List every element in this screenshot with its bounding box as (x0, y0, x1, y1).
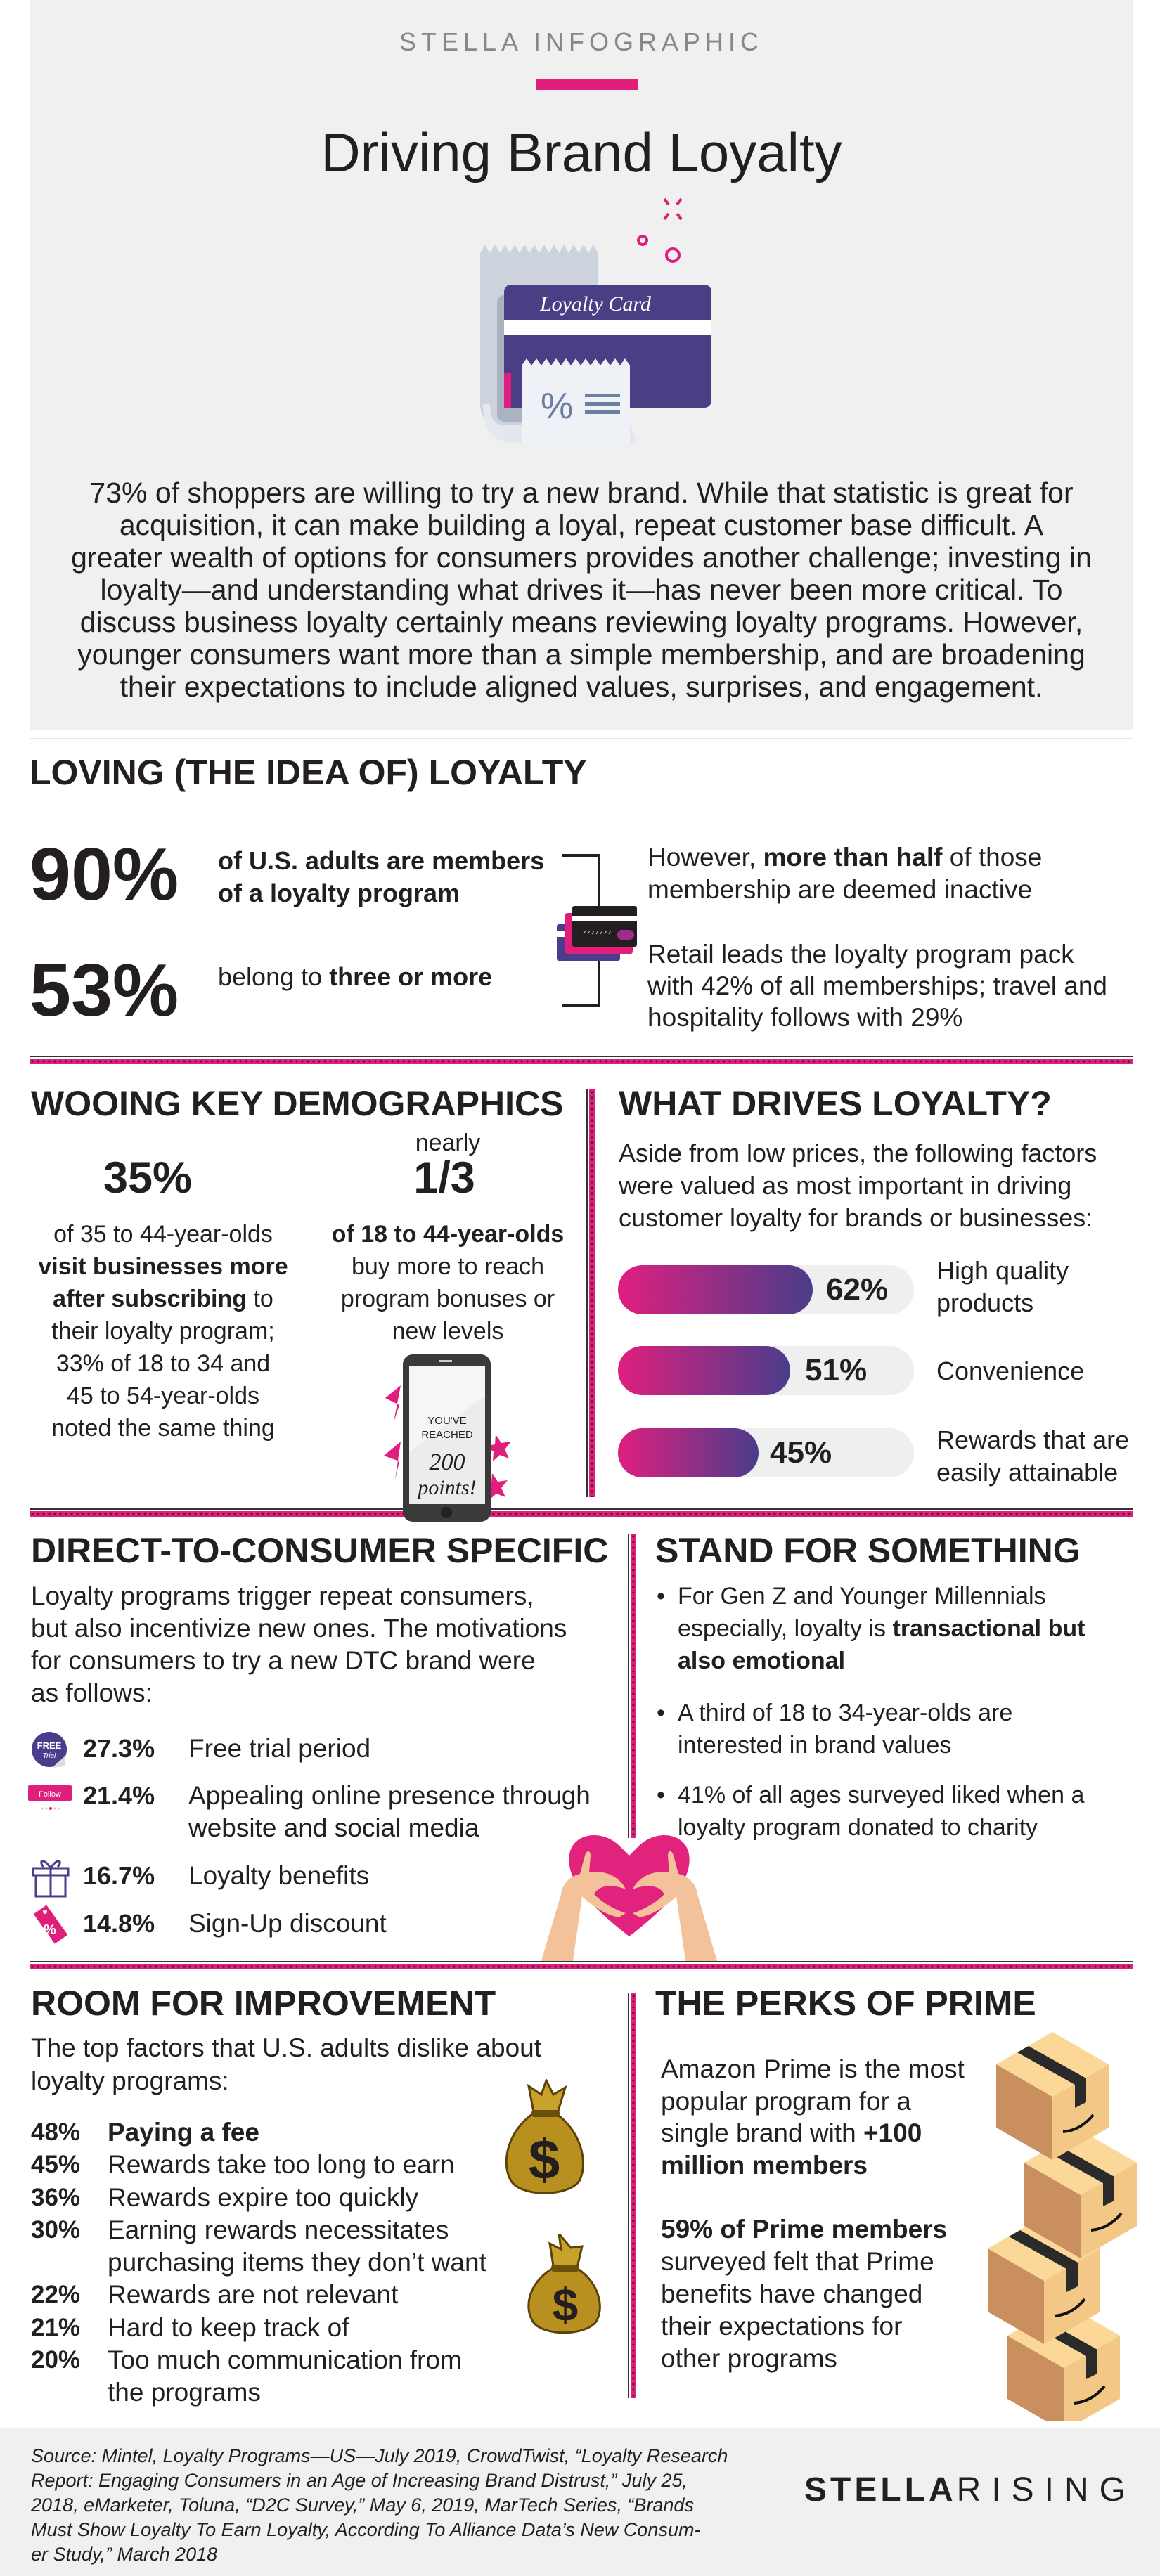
panel: wooing key demographics (31, 1084, 564, 1442)
stat 35% text: noted the same thing (51, 1415, 275, 1442)
dislike list: 20% (31, 2346, 80, 2374)
logo: stella rising: STELLARISING (804, 2471, 1136, 2509)
panel: room for improvement (31, 1983, 541, 2407)
header panel (30, 0, 1133, 730)
panel: stand for something: loyalty program donated to charity (678, 1814, 1038, 1841)
icon: phone 200 points: REACHED (421, 1429, 473, 1441)
heading: THE PERKS OF PRIME (655, 1983, 1036, 2023)
bar 45% (618, 1428, 914, 1477)
intro paragraph: discuss business loyalty certainly means reviewing loyalty programs. However, (80, 606, 1083, 638)
icon: loyalty card with receipt: Loyalty Card (539, 292, 652, 316)
icon: money bag 2: $ (553, 2279, 578, 2331)
dislike list: 22% (31, 2281, 80, 2308)
icon: phone 200 points (384, 1354, 511, 1522)
note: inactive memberships: However, more than half of those (647, 843, 1042, 872)
vertical divider (628, 1993, 636, 2398)
heading: DIRECT-TO-CONSUMER SPECIFIC (31, 1531, 608, 1570)
prime text 1: popular program for a (661, 2086, 911, 2116)
prime text 2 (661, 2215, 947, 2373)
stat 90% label (218, 846, 544, 907)
dislike list: Rewards take too long to earn (108, 2150, 455, 2179)
intro text: Loyalty programs trigger repeat consumers, (31, 1581, 534, 1610)
icon: free trial badge (32, 1732, 67, 1768)
intro text: The top factors that U.S. adults dislike about (31, 2033, 541, 2062)
dislike list: Rewards expire too quickly (108, 2183, 418, 2212)
intro paragraph: greater wealth of options for consumers provides another challenge; investing in (71, 541, 1092, 574)
prime text 2: surveyed felt that Prime (661, 2247, 934, 2276)
stat 1/3 text (332, 1221, 564, 1345)
bar chart: loyalty drivers: Convenience (936, 1357, 1084, 1385)
icon: free trial badge: FREE (37, 1740, 62, 1751)
vertical divider (628, 1534, 636, 1838)
stat 35% text: 33% of 18 to 34 and (56, 1350, 270, 1377)
title: Driving Brand Loyalty (321, 122, 842, 183)
dislike list: Too much communication from (108, 2345, 462, 2374)
bar 62% (618, 1265, 914, 1314)
stat 35% text: 45 to 54-year-olds (67, 1383, 259, 1409)
intro text: loyalty programs: (31, 2066, 229, 2095)
item: sign-up discount (34, 1905, 387, 1944)
bracket (562, 854, 600, 1007)
icon: phone 200 points: 200 (429, 1449, 465, 1475)
bar chart: loyalty drivers: products (936, 1288, 1033, 1317)
bar chart: loyalty drivers: easily attainable (936, 1458, 1118, 1487)
stat 53%: 53% (30, 949, 179, 1032)
intro paragraph (71, 477, 1092, 703)
heading: ROOM FOR IMPROVEMENT (31, 1983, 496, 2023)
heading: LOVING (THE IDEA OF) LOYALTY (30, 753, 587, 792)
icon: discount tag: % (44, 1922, 56, 1938)
heading: WHAT DRIVES LOYALTY? (619, 1084, 1052, 1123)
intro text: customer loyalty for brands or businesses: (619, 1203, 1093, 1232)
item: free trial: Free trial period (188, 1734, 370, 1763)
dislike list: 36% (31, 2184, 80, 2211)
stat 90% label: of a loyalty program (218, 879, 460, 907)
stat 1/3 text: program bonuses or (341, 1286, 555, 1312)
icon: loyalty card with receipt: % (541, 386, 573, 427)
stat 1/3 text: buy more to reach (352, 1253, 544, 1280)
item: online presence: Appealing online presence through (188, 1781, 591, 1810)
stat 35% text: visit businesses more (38, 1253, 288, 1280)
source text: Must Show Loyalty To Earn Loyalty, According To Alliance Data’s New Consum- (31, 2519, 700, 2540)
icon: stacked cards (557, 906, 637, 961)
panel: stand for something: especially, loyalty is transactional but (678, 1615, 1085, 1642)
stat 35% text: after subscribing to (53, 1286, 273, 1312)
stat nearly 1/3: nearly (415, 1130, 480, 1156)
panel: stand for something: For Gen Z and Younger Millennials (678, 1583, 1046, 1610)
heading: STAND FOR SOMETHING (655, 1531, 1081, 1570)
prime text 1: single brand with +100 (661, 2118, 922, 2147)
intro paragraph: acquisition, it can make building a loyal, repeat customer base difficult. A (120, 509, 1043, 541)
note: retail leads: Retail leads the loyalty program pack (647, 940, 1074, 969)
note: inactive memberships: membership are deemed inactive (647, 875, 1032, 904)
icon: follow button (28, 1785, 72, 1810)
dislike list: Rewards are not relevant (108, 2280, 398, 2309)
note: retail leads: with 42% of all memberships; travel and (647, 971, 1107, 1000)
dislike list: Hard to keep track of (108, 2313, 349, 2342)
bar 51% (618, 1346, 914, 1395)
source text (31, 2445, 728, 2565)
dislike list: purchasing items they don’t want (108, 2248, 486, 2277)
item: loyalty benefits: Loyalty benefits (188, 1861, 369, 1890)
kicker: stella infographic: STELLA INFOGRAPHIC (399, 27, 763, 56)
icon: money bag 1 (505, 2079, 584, 2194)
dislike list: the programs (108, 2378, 261, 2407)
intro text: for consumers to try a new DTC brand were (31, 1646, 536, 1675)
intro text: but also incentivize new ones. The motivations (31, 1614, 567, 1643)
item: free trial: 27.3% (83, 1734, 155, 1763)
bullet 2: • (657, 1700, 665, 1726)
item: online presence (28, 1781, 591, 1842)
icon: gift (32, 1860, 69, 1898)
pink accent bar (536, 79, 638, 90)
panel: stand for something: 41% of all ages surveyed liked when a (678, 1782, 1084, 1808)
intro paragraph: 73% of shoppers are willing to try a new brand. While that statistic is great for (89, 477, 1074, 509)
item: online presence: website and social media (188, 1813, 479, 1842)
dislike list: Earning rewards necessitates (108, 2215, 449, 2244)
icon: phone 200 points: YOU'VE (427, 1415, 467, 1427)
section: loving loyalty (30, 753, 1107, 1032)
prime text 2: benefits have changed (661, 2279, 922, 2308)
prime text 1: million members (661, 2151, 868, 2179)
dislike list: 48% (31, 2118, 80, 2146)
icon: loyalty card with receipt (480, 198, 711, 443)
prime text 2: 59% of Prime members (661, 2215, 947, 2244)
stat 35%: 35% (103, 1153, 192, 1203)
stat 53% label: belong to three or more (218, 962, 492, 991)
intro text (619, 1139, 1097, 1232)
source text: Source: Mintel, Loyalty Programs—US—July 2019, CrowdTwist, “Loyalty Research (31, 2445, 728, 2466)
intro paragraph: younger consumers want more than a simple membership, and are broadening (77, 638, 1085, 671)
note: inactive memberships (647, 843, 1042, 904)
bar chart: loyalty drivers: High quality (936, 1256, 1069, 1285)
dislike list: 30% (31, 2216, 80, 2244)
source text: er Study,” March 2018 (31, 2544, 217, 2565)
bar chart: loyalty drivers: Rewards that are (936, 1425, 1129, 1454)
icon: money bag 1: $ (529, 2128, 560, 2191)
bullet 1: • (657, 1583, 665, 1610)
panel: direct-to-consumer (28, 1531, 608, 1944)
bar 62%: 62% (826, 1272, 888, 1307)
prime text 1 (661, 2054, 965, 2179)
stat 35% text: their loyalty program; (51, 1318, 275, 1345)
stat 35% text (38, 1221, 288, 1442)
note: retail leads: hospitality follows with 29% (647, 1003, 962, 1032)
item: sign-up discount: Sign-Up discount (188, 1909, 387, 1938)
panel: stand for something: also emotional (678, 1648, 845, 1674)
stat 90% label: of U.S. adults are members (218, 846, 544, 875)
source text: Report: Engaging Consumers in an Age of Increasing Brand Distrust,” July 25, (31, 2470, 688, 2491)
stat 1/3 text: new levels (392, 1318, 503, 1345)
panel: stand for something (655, 1531, 1085, 1841)
bar 51%: 51% (805, 1353, 867, 1387)
dislike list: 21% (31, 2314, 80, 2341)
heading: WOOING KEY DEMOGRAPHICS (31, 1084, 563, 1123)
prime text 2: other programs (661, 2344, 837, 2373)
intro paragraph: their expectations to include aligned values, surprises, and engagement. (120, 671, 1043, 703)
intro text (31, 2033, 541, 2095)
icon: money bag 2 (527, 2234, 601, 2334)
prime text 2: their expectations for (661, 2312, 902, 2341)
icon: heart with hands (541, 1835, 717, 1961)
icon: free trial badge: Trial (43, 1752, 56, 1760)
item: sign-up discount: 14.8% (83, 1909, 155, 1938)
note: retail leads (647, 940, 1107, 1032)
panel: perks of prime (655, 1983, 1036, 2373)
stat 1/3 text: of 18 to 44-year-olds (332, 1221, 564, 1248)
dislike list: 45% (31, 2151, 80, 2178)
item: free trial (32, 1732, 370, 1768)
item: loyalty benefits: 16.7% (83, 1861, 155, 1890)
bar chart: loyalty drivers (618, 1256, 1129, 1487)
intro paragraph: loyalty—and understanding what drives it—has never been more critical. To (101, 574, 1062, 606)
panel: stand for something: A third of 18 to 34-year-olds are (678, 1700, 1012, 1726)
dislike list: Paying a fee (108, 2118, 259, 2147)
stat 35% text: of 35 to 44-year-olds (53, 1221, 273, 1248)
vertical divider (586, 1089, 595, 1497)
panel: stand for something: interested in brand values (678, 1732, 951, 1759)
intro text: as follows: (31, 1678, 153, 1707)
item: loyalty benefits (32, 1860, 369, 1898)
icon: follow button: Follow (39, 1790, 61, 1799)
icon: phone 200 points: points! (416, 1476, 477, 1499)
icon: stacked boxes (988, 2032, 1137, 2421)
item: online presence: 21.4% (83, 1781, 155, 1810)
panel: wooing key demographics: 1/3 (413, 1153, 475, 1203)
intro text: Aside from low prices, the following factors (619, 1139, 1097, 1167)
intro text (31, 1581, 567, 1707)
bar 45%: 45% (770, 1435, 832, 1470)
intro text: were valued as most important in driving (619, 1171, 1071, 1200)
stat 90%: 90% (30, 833, 179, 916)
dislike list (31, 2118, 486, 2407)
prime text 1: Amazon Prime is the most (661, 2054, 965, 2083)
panel: what drives loyalty (619, 1084, 1097, 1232)
source text: 2018, eMarketer, Toluna, “D2C Survey,” May 6, 2019, MarTech Series, “Brands (31, 2494, 694, 2516)
icon: discount tag (34, 1905, 67, 1944)
footer panel (0, 2428, 1160, 2576)
bullet 3: • (657, 1782, 665, 1808)
